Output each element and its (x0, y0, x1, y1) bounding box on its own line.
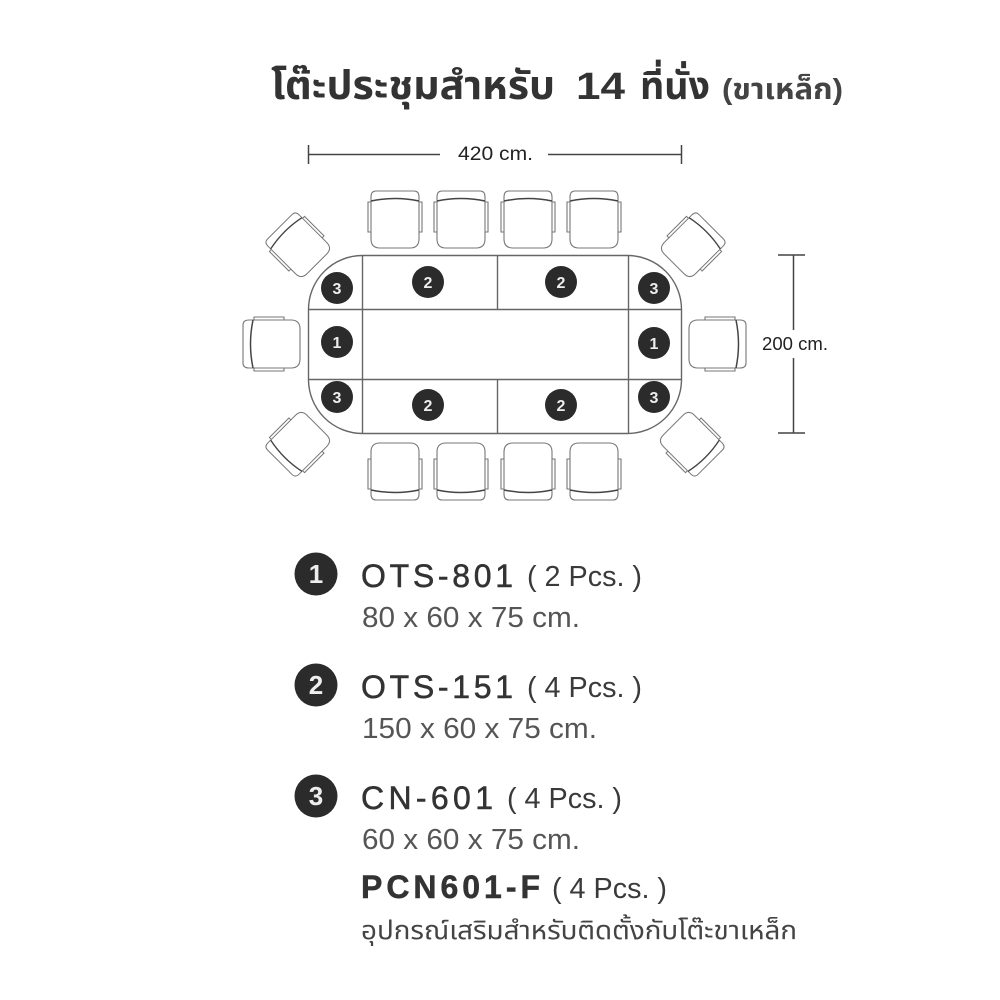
table part number badges: 1 (650, 336, 659, 353)
legend item 3 (294, 774, 622, 856)
title (271, 59, 843, 110)
title: (ขาเหล็ก) (722, 74, 843, 106)
legend item 1: OTS-801 (361, 558, 513, 594)
legend item 3: CN-601 (361, 780, 493, 816)
legend item 2 (294, 664, 642, 745)
accessory: PCN601-F: อุปกรณ์เสริมสำหรับติดตั้งกับโต๊ะขาเหล็ก (361, 913, 797, 946)
title: ที่นั่ง (640, 59, 710, 108)
legend item 2: ( 4 Pcs. ) (527, 672, 642, 704)
dimension: width 420 cm (308, 144, 682, 165)
table part number badges: 3 (333, 390, 342, 407)
table part number badges: 3 (650, 390, 659, 407)
legend item 1 (294, 552, 642, 634)
table part number badges: 3 (650, 281, 659, 298)
legend item 3: ( 4 Pcs. ) (507, 783, 622, 815)
legend item 3: 60 x 60 x 75 cm. (362, 824, 580, 856)
legend item 1: 80 x 60 x 75 cm. (362, 602, 580, 634)
chairs (243, 191, 746, 500)
table part number badges: 1 (333, 335, 342, 352)
dimension: depth 200 cm (762, 255, 828, 433)
table part number badges: 2 (557, 398, 566, 415)
title: 14 (576, 66, 625, 108)
table part number badges: 3 (333, 281, 342, 298)
legend item 2: 2 (309, 670, 323, 700)
dimension: width 420 cm: 420 cm. (458, 144, 533, 165)
table part number badges: 2 (424, 398, 433, 415)
table part number badges: 2 (557, 275, 566, 292)
accessory: PCN601-F (361, 869, 797, 946)
table part number badges: 2 (424, 275, 433, 292)
accessory: PCN601-F: ( 4 Pcs. ) (552, 873, 667, 905)
table part number badges (321, 266, 670, 421)
legend item 2: OTS-151 (361, 669, 513, 705)
legend item 3: 3 (309, 781, 323, 811)
title: โต๊ะประชุมสำหรับ (271, 64, 555, 110)
legend item 2: 150 x 60 x 75 cm. (362, 713, 597, 745)
legend item 1: 1 (309, 559, 323, 589)
legend item 1: ( 2 Pcs. ) (527, 561, 642, 593)
accessory: PCN601-F: PCN601-F (361, 869, 540, 905)
dimension: depth 200 cm: 200 cm. (762, 334, 828, 354)
table layout (308, 255, 682, 434)
